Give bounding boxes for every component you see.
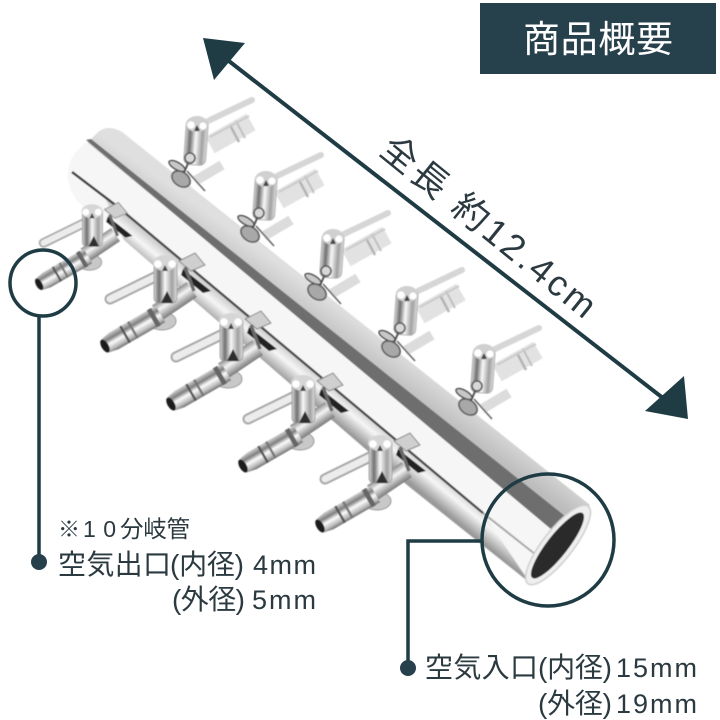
note: ten-way manifold: ※: [58, 517, 80, 542]
title box: 商品概要: [523, 19, 673, 60]
callout: air outlet: [10, 250, 76, 570]
note: ten-way manifold: 分岐管: [120, 516, 190, 542]
inlet specification: (内径): [538, 652, 612, 683]
outlet specification: (外径): [172, 584, 245, 615]
inlet specification: 19mm: [616, 689, 697, 719]
photo: stainless air manifold: [32, 100, 600, 593]
inlet specification: 空気入口: [425, 652, 538, 683]
callout: air inlet: [400, 474, 614, 676]
outlet specification: 5mm: [252, 585, 316, 615]
inlet specification: (外径): [538, 688, 612, 719]
outlet specification: [58, 549, 316, 615]
outlet specification: 空気出口: [58, 549, 171, 580]
inlet specification: [425, 652, 697, 719]
tube opening: [516, 497, 600, 593]
title box: [480, 3, 716, 74]
main tube: [68, 128, 590, 583]
length label: 全長 約12.4cm: [373, 127, 605, 326]
arrow: overall length: [203, 38, 688, 419]
note: ten-way manifold: 10: [83, 516, 116, 542]
outlet specification: 4mm: [253, 550, 316, 580]
lower valves: [32, 202, 426, 536]
inlet specification: 15mm: [616, 653, 697, 683]
upper valves: [167, 100, 539, 419]
outlet specification: (内径): [170, 549, 244, 580]
note: ten-way manifold: [58, 516, 190, 542]
